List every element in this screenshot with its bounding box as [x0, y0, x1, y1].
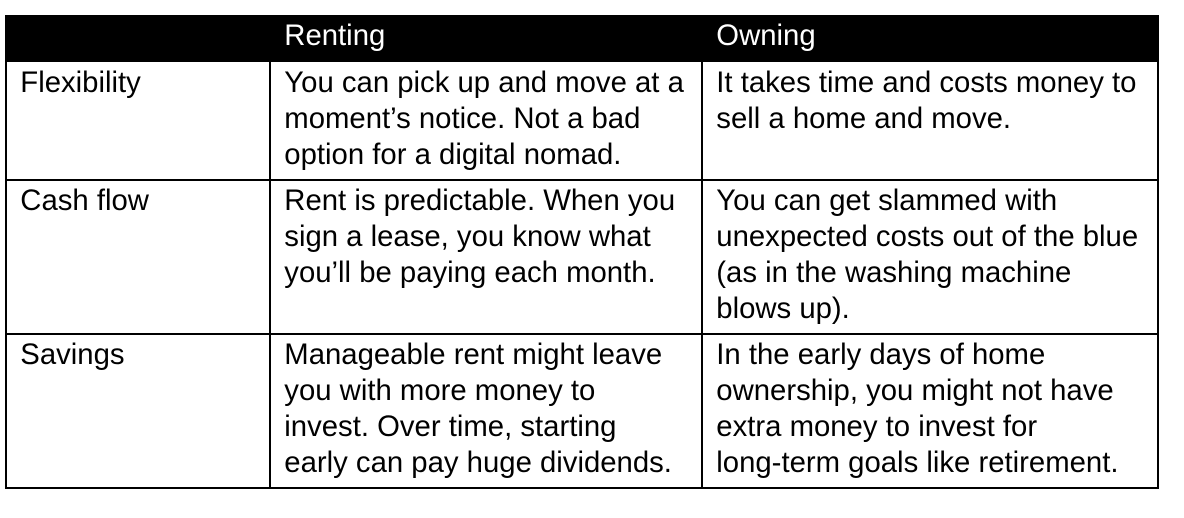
row label: Cash flow: Cash flow: [20, 184, 149, 217]
row: cash flow: [20, 184, 1138, 325]
text: renting cash flow: Rent is predictable. When you sign a lease, you know what you’ll be paying each month.: [284, 184, 675, 289]
header row: [5, 15, 1159, 62]
text: owning savings: In the early days of home ownership, you might not have extra money to invest for long-term goals like retirement.: [716, 338, 1118, 479]
text: owning flexibility: It takes time and costs money to sell a home and move.: [716, 66, 1136, 135]
text: renting savings: Manageable rent might leave you with more money to invest. Over time, starting early can pay huge dividends.: [284, 338, 672, 479]
row: savings: [20, 338, 1118, 479]
row label: Flexibility: Flexibility: [20, 66, 141, 99]
text: renting flexibility: You can pick up and move at a moment’s notice. Not a bad option for a digital nomad.: [284, 66, 684, 171]
row label: Savings: Savings: [20, 338, 125, 371]
row: flexibility: [20, 66, 1136, 171]
text: owning cash flow: You can get slammed with unexpected costs out of the blue (as in the washing machine blows up).: [716, 184, 1138, 325]
heading: Renting: Renting: [284, 19, 385, 52]
heading: Owning: Owning: [716, 19, 816, 52]
